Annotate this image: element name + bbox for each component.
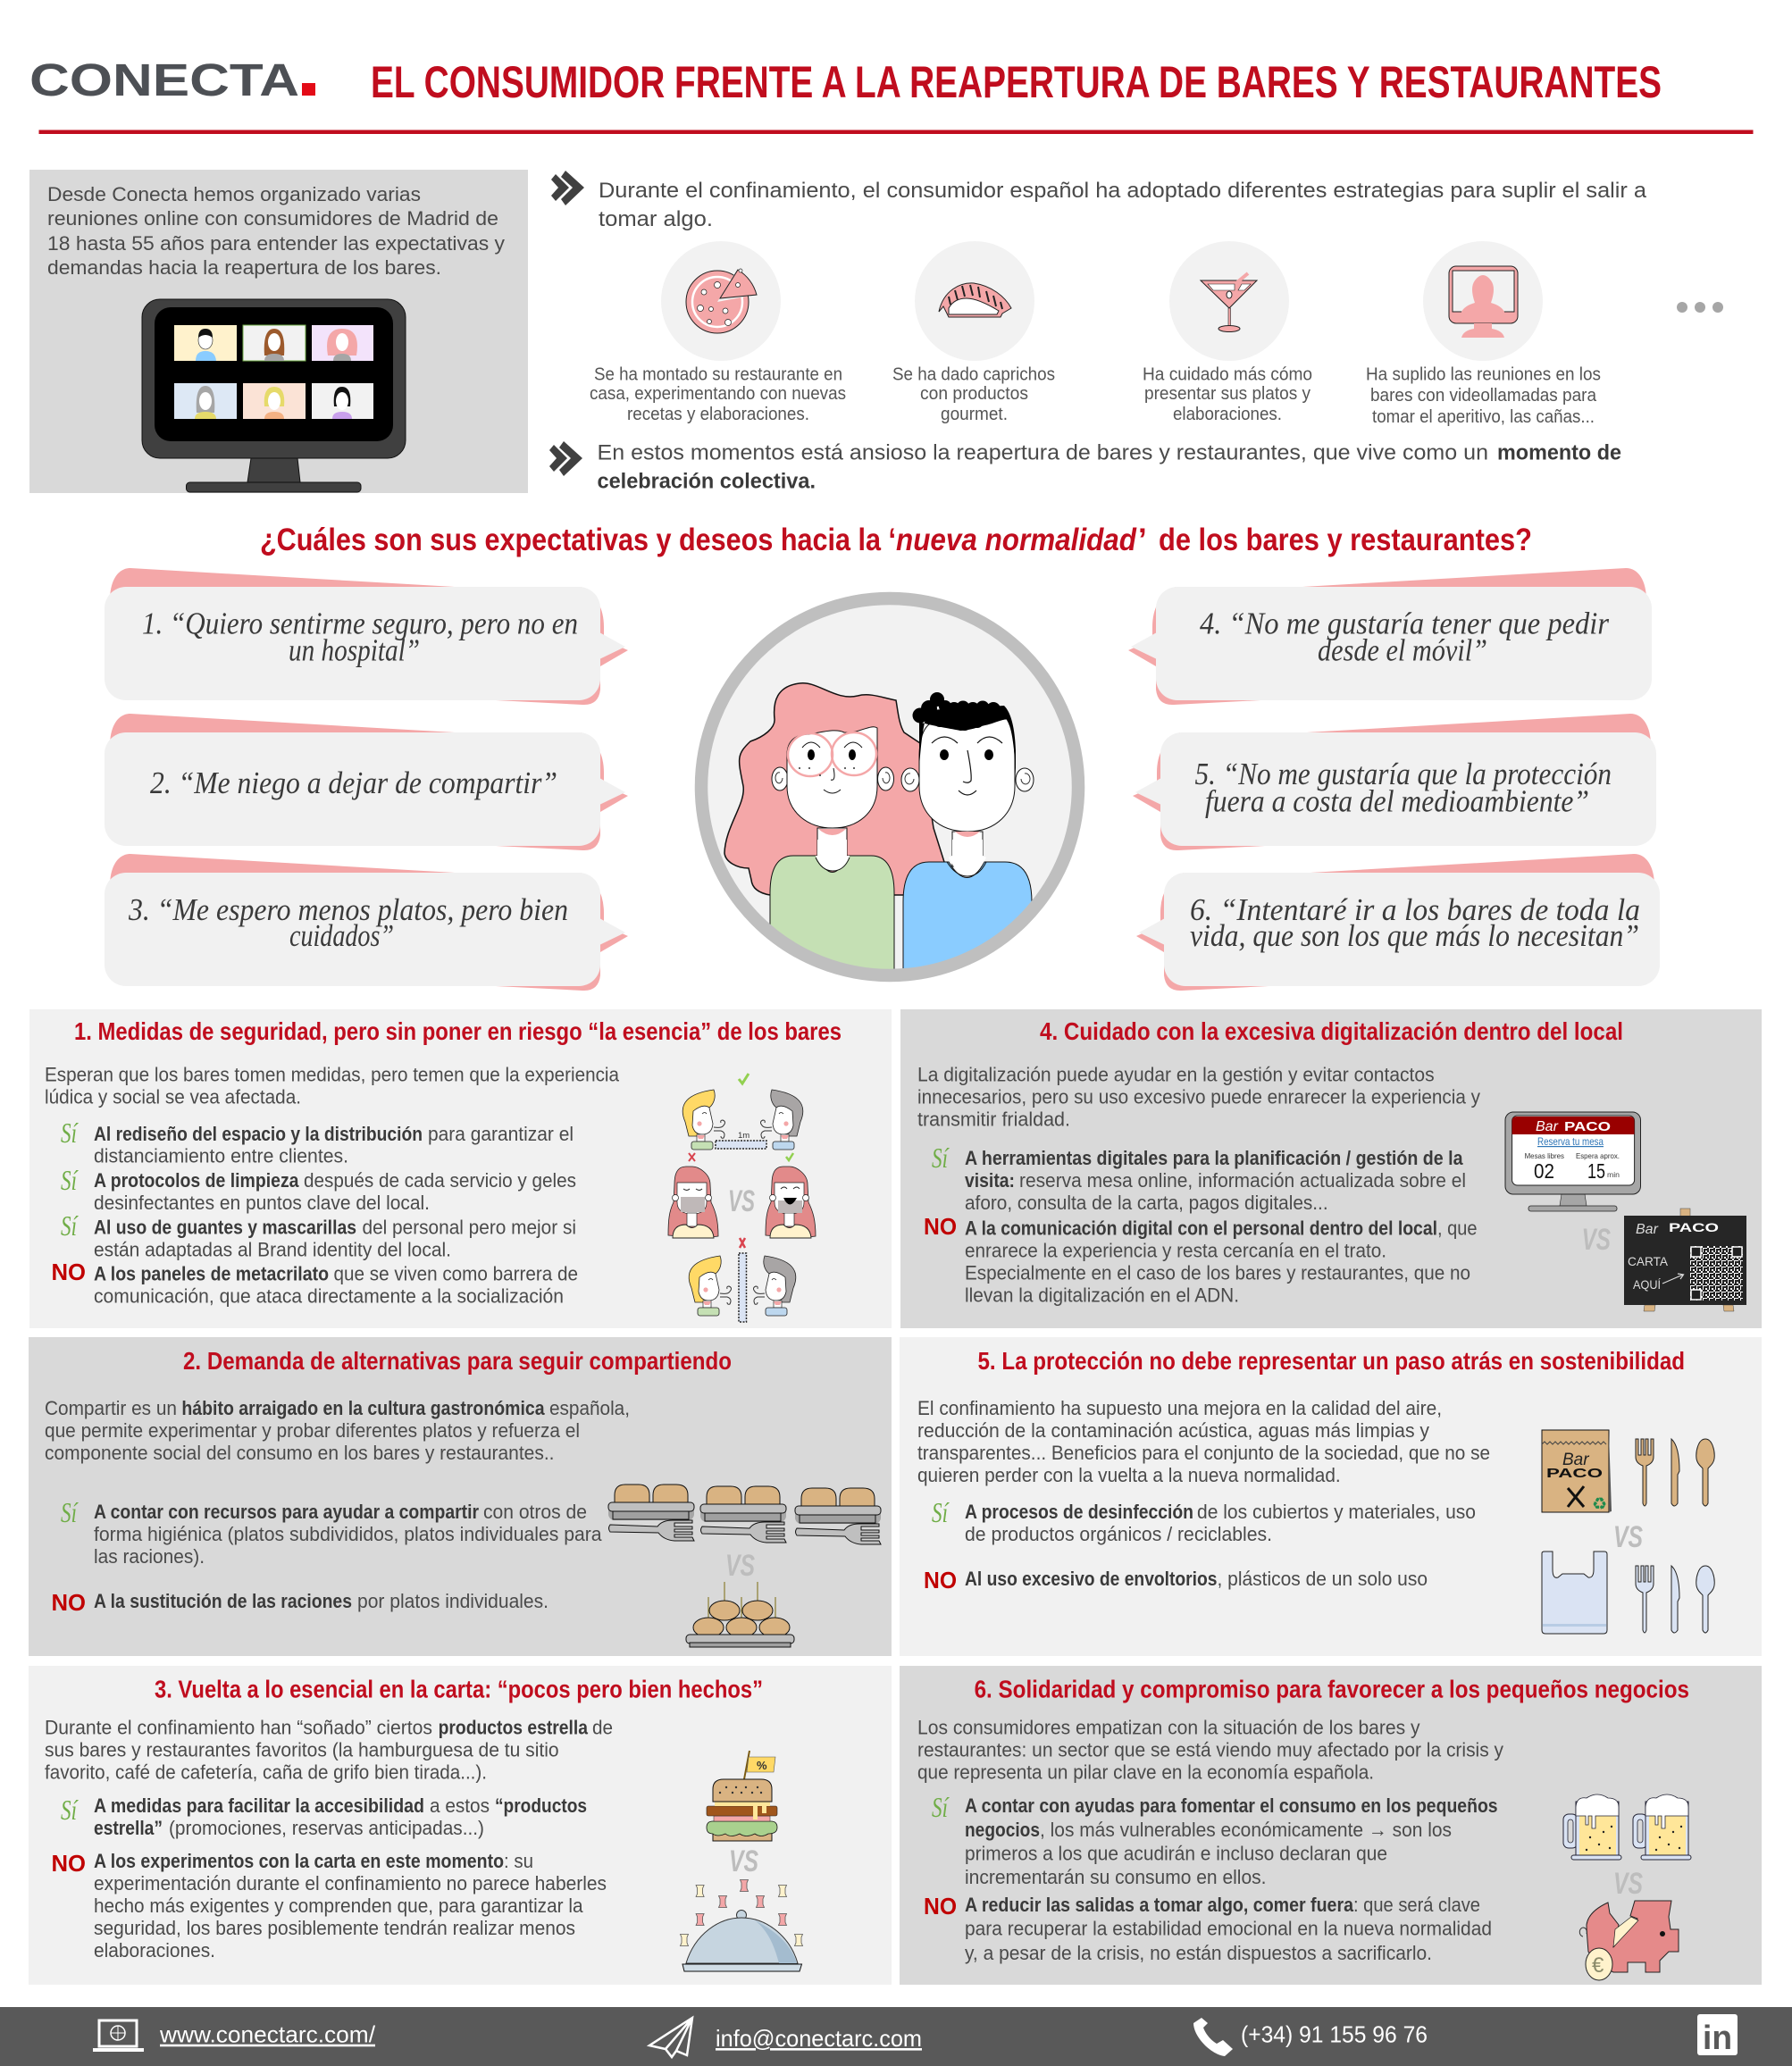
- illustration: distancing comparison: VS: [728, 1184, 755, 1218]
- item: sí guantes: del personal pero mejor si: [363, 1217, 576, 1239]
- icon: cocktail: [1169, 241, 1289, 361]
- vs: VS: [1613, 1520, 1643, 1554]
- item: no raciones: por platos individuales.: [357, 1590, 548, 1612]
- illustration: reservation screen: 15: [1587, 1159, 1605, 1183]
- body text: [45, 1397, 630, 1464]
- caption: video call: [1366, 364, 1601, 427]
- item: no envoltorios: , plásticos de un solo uso: [1217, 1568, 1428, 1590]
- body text: quieren perder con la vuelta a la nueva normalidad.: [917, 1464, 1341, 1486]
- body text: lúdica y social se vea afectada.: [45, 1086, 301, 1108]
- item: no envoltorios: [924, 1567, 1428, 1593]
- body text: reducción de la contaminación acústica, aguas más limpias y: [917, 1419, 1430, 1442]
- illustration: kraft bag and wooden cutlery: [1542, 1430, 1714, 1514]
- logo: Conecta: CONECTA: [29, 54, 299, 105]
- link: web: www.conectarc.com/: [159, 2021, 376, 2048]
- item: sí herramientas: visita:: [965, 1169, 1015, 1192]
- heading: 6. Solidaridad y compromiso para favorecer a los pequeños negocios: [975, 1676, 1689, 1703]
- text: confinamiento: Durante el confinamiento, el consumidor español ha adoptado diferentes estrategias para suplir el salir a: [599, 179, 1646, 203]
- illustration: kraft bag and wooden cutlery: Bar: [1562, 1451, 1589, 1469]
- item: sí limpieza: desinfectantes en puntos clave del local.: [94, 1192, 430, 1214]
- item: sí ayudas: , los más vulnerables económicamente → son los: [1040, 1819, 1452, 1841]
- illustration: beer mugs: [1563, 1794, 1691, 1860]
- body text: transmitir frialdad.: [917, 1108, 1070, 1131]
- item: sí desinfección: de los cubiertos y materiales, uso: [1197, 1501, 1476, 1523]
- man: [901, 719, 1034, 991]
- illustration: QR blackboard: AQUÍ: [1633, 1277, 1661, 1292]
- link: email: info@conectarc.com: [716, 2025, 922, 2052]
- item: no experimentos: seguridad, los bares posiblemente tendrán realizar menos: [94, 1917, 575, 1939]
- speech bubble 1: un hospital”: [289, 632, 420, 668]
- caption: cocktail: presentar sus platos y: [1144, 384, 1311, 404]
- item: sí accesibilidad: [61, 1794, 587, 1839]
- illustration: plates with forks: [608, 1485, 881, 1544]
- footer bar: [0, 2007, 1792, 2066]
- vs: VS: [1582, 1223, 1611, 1257]
- speech bubble 6: [1136, 854, 1660, 991]
- item: sí guantes: Al uso de guantes y mascarillas: [94, 1217, 356, 1239]
- item: no comunicación digital: , que: [1437, 1217, 1478, 1240]
- illustration: reservation screen: Mesas libres: [1525, 1151, 1564, 1160]
- item: sí limpieza: después de cada servicio y geles: [304, 1169, 576, 1192]
- illustration: reservation screen: Bar: [1536, 1119, 1559, 1134]
- illustration: burger with flag: [707, 1751, 777, 1841]
- item: sí ayudas: incrementarán su consumo en ellos.: [965, 1866, 1267, 1888]
- caption: video call: Ha suplido las reuniones en los: [1366, 364, 1601, 384]
- intro text: [47, 183, 506, 279]
- caption: sushi: [892, 364, 1055, 424]
- item: no metacrilato: A los paneles de metacrilato: [94, 1262, 329, 1284]
- speech bubble 5: [1133, 714, 1656, 850]
- heading: 5. La protección no debe representar un paso atrás en sostenibilidad: [977, 1347, 1685, 1375]
- item: sí accesibilidad: (promociones, reservas anticipadas...): [169, 1817, 484, 1839]
- icon: ellipsis dots: [1677, 302, 1723, 313]
- text: momento de celebración: En estos momentos está ansioso la reapertura de bares y restaurantes, que vive como un: [597, 441, 1488, 464]
- body text: [45, 1064, 619, 1108]
- text: confinamiento: tomar algo.: [599, 207, 713, 231]
- intro text: demandas hacia la reapertura de los bares.: [47, 256, 441, 279]
- body text: [917, 1397, 1490, 1486]
- item: sí desinfección: Sí: [932, 1496, 950, 1528]
- panel 2: alternativas para compartir: [29, 1337, 892, 1656]
- item: no raciones: A la sustitución de las raciones: [94, 1590, 352, 1612]
- item: sí accesibilidad: A medidas para facilitar la accesibilidad: [94, 1794, 424, 1817]
- item: sí desinfección: A procesos de desinfección: [965, 1501, 1193, 1523]
- item: sí compartir: [61, 1496, 602, 1568]
- speech bubble 4: 4. “No me gustaría tener que pedir: [1200, 606, 1609, 641]
- item: sí accesibilidad: Sí: [61, 1794, 79, 1826]
- item: no raciones: [52, 1589, 548, 1616]
- speech bubble 6: vida, que son los que más lo necesitan”: [1190, 918, 1639, 953]
- item: sí accesibilidad: “productos: [495, 1794, 587, 1817]
- illustration: broken piggy bank: €: [1592, 1953, 1604, 1978]
- body text: Esperan que los bares tomen medidas, pero temen que la experiencia: [45, 1064, 619, 1086]
- intro text: Desde Conecta hemos organizado varias: [47, 183, 421, 205]
- item: sí compartir: con otros de: [483, 1501, 587, 1523]
- body text: [917, 1717, 1504, 1784]
- item: no comunicación digital: A la comunicación digital con el personal dentro del local: [965, 1217, 1437, 1240]
- icon: sushi: [915, 241, 1034, 361]
- body text: que representa un pilar clave en la economía española.: [917, 1761, 1374, 1784]
- item: no envoltorios: NO: [924, 1567, 957, 1593]
- item: sí compartir: A contar con recursos para ayudar a compartir: [94, 1501, 479, 1523]
- body text: innecesarios, pero su uso excesivo puede enrarecer la experiencia y: [917, 1086, 1481, 1108]
- caption: sushi: gourmet.: [941, 405, 1008, 424]
- item: no experimentos: experimentación durante el confinamiento no parece haberles: [94, 1872, 607, 1895]
- question heading: ¿Cuáles son sus expectativas y deseos hacia la ‘: [260, 523, 896, 557]
- item: no experimentos: elaboraciones.: [94, 1939, 215, 1961]
- illustration: shared skewers: [686, 1582, 794, 1647]
- icon: chevrons: [551, 171, 584, 205]
- speech bubble 4: [1128, 568, 1652, 705]
- intro text: 18 hasta 55 años para entender las expectativas y: [47, 232, 506, 255]
- item: no experimentos: NO: [52, 1850, 86, 1877]
- text: momento de celebración: [597, 441, 1621, 493]
- item: no reducir salidas: [924, 1893, 1492, 1964]
- body text: de: [592, 1717, 613, 1739]
- body text: Compartir es un: [45, 1397, 177, 1419]
- illustration: distancing comparison: 1m: [738, 1131, 749, 1141]
- panel 5: sostenibilidad: [900, 1337, 1762, 1656]
- caption: pizza: recetas y elaboraciones.: [627, 405, 809, 424]
- item: sí ayudas: negocios: [965, 1819, 1040, 1841]
- speech bubble 3: [105, 854, 628, 991]
- illustration: burger with flag: %: [757, 1759, 767, 1772]
- speech bubble 2: 2. “Me niego a dejar de compartir”: [150, 765, 557, 800]
- illustration: reservation screen: min: [1607, 1171, 1620, 1179]
- item: no metacrilato: que se viven como barrera de: [334, 1262, 578, 1284]
- panel 6: solidaridad: [900, 1666, 1762, 1985]
- heading: 1. Medidas de seguridad, pero sin poner en riesgo “la esencia” de los bares: [74, 1017, 842, 1045]
- text: confinamiento: [599, 179, 1646, 231]
- item: sí ayudas: [932, 1791, 1498, 1888]
- panel 4: digitalización: [900, 1009, 1762, 1328]
- panel: intro with monitor: [29, 170, 528, 493]
- body text: favorito, café de cafetería, caña de grifo bien tirada...).: [45, 1761, 487, 1784]
- vs: VS: [725, 1549, 755, 1583]
- illustration: kraft bag and wooden cutlery: PACO: [1546, 1466, 1603, 1481]
- speech bubble 3: 3. “Me espero menos platos, pero bien: [128, 892, 568, 927]
- speech bubble 5: fuera a costa del medioambiente”: [1205, 784, 1589, 818]
- question heading: ’: [1138, 523, 1147, 557]
- item: no comunicación digital: Especialmente en el caso de los bares y restaurantes, que no: [965, 1262, 1470, 1284]
- panel 3: vuelta a lo esencial: [29, 1666, 892, 1985]
- woman: [724, 683, 944, 991]
- illustration: reservation screen: [1505, 1112, 1640, 1211]
- icon: linkedin: [1697, 2014, 1738, 2057]
- question heading: [260, 523, 1532, 557]
- item: no comunicación digital: [924, 1213, 1478, 1307]
- body text: [917, 1064, 1481, 1131]
- central circle with couple: [700, 598, 1079, 991]
- text: phone number: (+34) 91 155 96 76: [1241, 2021, 1428, 2048]
- caption: pizza: Se ha montado su restaurante en: [594, 364, 842, 384]
- icon: chevrons: [549, 441, 582, 476]
- item: no metacrilato: comunicación, que ataca directamente a la socialización: [94, 1284, 564, 1307]
- icon: phone: [1193, 2018, 1233, 2056]
- illustration: cloche with stars: [681, 1879, 802, 1971]
- body text: española,: [549, 1397, 630, 1419]
- question heading: nueva normalidad: [896, 523, 1137, 557]
- item: sí espacio: Sí: [61, 1117, 79, 1149]
- body text: Los consumidores empatizan con la situación de los bares y: [917, 1717, 1420, 1739]
- caption: cocktail: Ha cuidado más cómo: [1143, 364, 1312, 384]
- item: no metacrilato: [52, 1259, 578, 1307]
- illustration: reservation screen: PACO: [1564, 1119, 1611, 1134]
- item: no reducir salidas: y, a pesar de la crisis, no están dispuestos a sacrificarlo.: [965, 1942, 1432, 1964]
- speech bubble 1: [105, 568, 628, 705]
- illustration: QR blackboard: PACO: [1669, 1220, 1719, 1234]
- item: sí limpieza: A protocolos de limpieza: [94, 1169, 299, 1192]
- text: momento de celebración: celebración colectiva.: [597, 470, 816, 493]
- heading: 4. Cuidado con la excesiva digitalización dentro del local: [1040, 1017, 1623, 1045]
- item: no comunicación digital: llevan la digitalización en el ADN.: [965, 1284, 1239, 1307]
- item: sí compartir: Sí: [61, 1496, 79, 1528]
- illustration: kraft bag and wooden cutlery: ♻: [1592, 1495, 1607, 1514]
- item: sí guantes: están adaptadas al Brand identity del local.: [94, 1239, 451, 1261]
- vs: VS: [1613, 1867, 1643, 1901]
- item: sí ayudas: primeros a los que acudirán e incluso declaran que: [965, 1843, 1387, 1865]
- item: no reducir salidas: : que será clave: [1353, 1894, 1480, 1916]
- item: sí limpieza: Sí: [61, 1164, 79, 1196]
- speech bubble 5: 5. “No me gustaría que la protección: [1195, 757, 1612, 791]
- icon: video call screen: [1423, 241, 1543, 361]
- speech bubble 1: 1. “Quiero sentirme seguro, pero no en: [142, 606, 578, 641]
- item: sí compartir: forma higiénica (platos subdivididos, platos individuales para: [94, 1523, 602, 1545]
- caption: cocktail: elaboraciones.: [1173, 405, 1282, 424]
- panel 1: medidas de seguridad: [29, 1009, 892, 1328]
- item: sí ayudas: A contar con ayudas para fomentar el consumo en los pequeños: [965, 1794, 1498, 1817]
- question heading: de los bares y restaurantes?: [1159, 523, 1532, 557]
- caption: video call: tomar el aperitivo, las cañas...: [1372, 407, 1595, 427]
- body text: [45, 1717, 613, 1784]
- caption: pizza: casa, experimentando con nuevas: [590, 384, 846, 404]
- item: no reducir salidas: NO: [924, 1893, 957, 1920]
- item: sí ayudas: Sí: [932, 1791, 950, 1823]
- body text: restaurantes: un sector que se está viendo muy afectado por la crisis y: [917, 1739, 1504, 1761]
- icon: paper plane: [649, 2018, 692, 2057]
- item: no experimentos: [52, 1850, 607, 1961]
- item: no reducir salidas: A reducir las salidas a tomar algo, comer fuera: [965, 1894, 1353, 1916]
- item: sí herramientas: [932, 1142, 1466, 1214]
- item: sí espacio: para garantizar el: [428, 1123, 574, 1145]
- illustration: reservation screen: Reserva tu mesa: [1537, 1135, 1604, 1148]
- illustration: distancing comparison: [668, 1074, 816, 1322]
- item: sí herramientas: A herramientas digitales para la planificación / gestión de la: [965, 1147, 1463, 1169]
- illustration: reservation screen: Espera aprox.: [1576, 1151, 1620, 1160]
- icon: pizza: [661, 241, 781, 361]
- item: no raciones: NO: [52, 1589, 86, 1616]
- illustration: QR blackboard: [1624, 1209, 1746, 1311]
- speech bubble 2: [105, 714, 628, 850]
- item: sí espacio: Al rediseño del espacio y la distribución: [94, 1123, 423, 1145]
- body text: transparentes... Beneficios para el conjunto de la sociedad, que no se: [917, 1442, 1490, 1464]
- caption: pizza: [590, 364, 846, 424]
- item: no metacrilato: NO: [52, 1259, 86, 1285]
- icon: monitor video call: [142, 299, 406, 492]
- item: sí espacio: [61, 1117, 574, 1167]
- caption: cocktail: [1143, 364, 1312, 424]
- item: sí guantes: Sí: [61, 1209, 79, 1242]
- item: sí accesibilidad: a estos: [430, 1794, 490, 1817]
- item: no experimentos: : su: [504, 1850, 533, 1872]
- body text: Durante el confinamiento han “soñado” ciertos: [45, 1717, 432, 1739]
- body text: La digitalización puede ayudar en la gestión y evitar contactos: [917, 1064, 1435, 1086]
- heading: 3. Vuelta a lo esencial en la carta: “pocos pero bien hechos”: [155, 1676, 763, 1703]
- speech bubble 3: cuidados”: [289, 918, 394, 953]
- body text: El confinamiento ha supuesto una mejora en la calidad del aire,: [917, 1397, 1442, 1419]
- caption: video call: bares con videollamadas para: [1370, 386, 1597, 406]
- item: sí compartir: las raciones).: [94, 1545, 205, 1568]
- icon: linkedin: in: [1703, 2020, 1732, 2057]
- icon: laptop: [93, 2020, 144, 2052]
- item: no experimentos: hecho más exigentes y comprenden que, para garantizar la: [94, 1895, 583, 1917]
- item: no experimentos: A los experimentos con la carta en este momento: [94, 1850, 504, 1872]
- body text: que permite experimentar y probar diferentes platos y refuerza el: [45, 1419, 580, 1442]
- item: sí desinfección: [932, 1496, 1476, 1545]
- item: sí desinfección: de productos orgánicos / reciclables.: [965, 1523, 1272, 1545]
- item: no reducir salidas: para recuperar la estabilidad emocional en la nueva normalidad: [965, 1918, 1492, 1940]
- body text: productos estrella: [439, 1717, 588, 1739]
- illustration: broken piggy bank: [1579, 1901, 1679, 1980]
- illustration: QR blackboard: Bar: [1636, 1222, 1659, 1237]
- item: sí limpieza: [61, 1164, 576, 1214]
- item: sí accesibilidad: estrella”: [94, 1817, 163, 1839]
- body text: hábito arraigado en la cultura gastronómica: [181, 1397, 545, 1419]
- illustration: plastic bag and cutlery: [1542, 1552, 1714, 1634]
- speech bubble 6: 6. “Intentaré ir a los bares de toda la: [1190, 892, 1640, 927]
- item: no comunicación digital: NO: [924, 1213, 957, 1240]
- intro text: reuniones online con consumidores de Madrid de: [47, 207, 498, 230]
- illustration: reservation screen: 02: [1534, 1159, 1554, 1183]
- vs: VS: [729, 1844, 758, 1878]
- caption: sushi: con productos: [920, 384, 1028, 404]
- body text: componente social del consumo en los bares y restaurantes..: [45, 1442, 554, 1464]
- heading: 2. Demanda de alternativas para seguir compartiendo: [183, 1347, 732, 1375]
- illustration: QR blackboard: CARTA: [1628, 1254, 1669, 1268]
- item: no comunicación digital: enrarece la experiencia y resta cercanía en el trato.: [965, 1240, 1386, 1262]
- caption: sushi: Se ha dado caprichos: [892, 364, 1055, 384]
- item: sí herramientas: Sí: [932, 1142, 950, 1174]
- body text: sus bares y restaurantes favoritos (la hamburguesa de tu sitio: [45, 1739, 559, 1761]
- item: sí guantes: [61, 1209, 576, 1261]
- item: sí herramientas: aforo, consulta de la carta, pagos digitales...: [965, 1192, 1328, 1214]
- text: momento de celebración: momento de: [1497, 441, 1621, 464]
- speech bubble 4: desde el móvil”: [1318, 632, 1487, 668]
- item: no envoltorios: Al uso excesivo de envoltorios: [965, 1568, 1217, 1590]
- item: sí herramientas: reserva mesa online, información actualizada sobre el: [1019, 1169, 1466, 1192]
- item: sí espacio: distanciamiento entre clientes.: [94, 1145, 348, 1167]
